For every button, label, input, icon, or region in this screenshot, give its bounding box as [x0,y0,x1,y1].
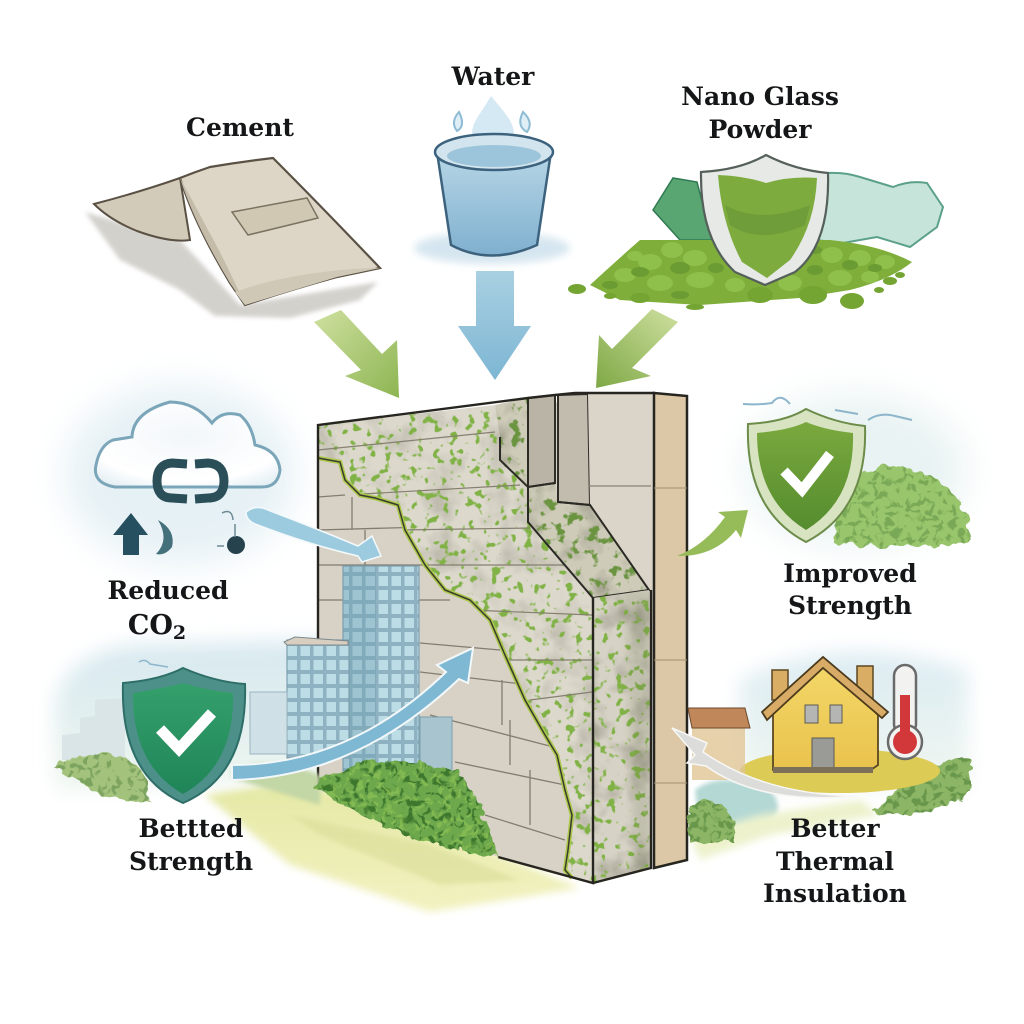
mossy inner strips [495,399,647,597]
wall outline [318,393,655,883]
green glass chunk [653,178,712,240]
icon: bird [139,660,168,667]
panel: ground [205,780,880,912]
illustration: bushes around the wall [50,740,975,865]
arrow: from water [458,271,531,380]
icon: house windows [805,705,842,723]
brick lines [318,495,590,840]
icon: yellow house body [773,665,878,772]
arrow: house to wall [672,728,857,798]
darker powder grains [602,246,882,299]
arrow: curved to wall from bettered strength [232,648,473,780]
title: Cement: Cement [186,113,294,142]
group: Improved Strength [677,398,975,620]
icon: house roof [762,657,888,720]
label: Improved Strength: Strength [788,591,912,620]
icon: small sprout [156,520,173,554]
title: Water: Water [451,62,535,91]
arrow: from nano glass [596,309,678,388]
icon: check [784,454,830,490]
loose powder grains [568,272,905,310]
arrow: wall to cloud [246,507,381,562]
label: Improved Strength: Improved [783,559,917,588]
panel: soft background halos [55,385,968,830]
side panel joints [654,488,687,783]
icon: small house [688,708,750,780]
label: Better Thermal Insulation: Better [790,814,880,843]
label: Reduced CO2: 2 [173,622,186,644]
group: Bettered Strength [123,660,253,876]
arrow: to shield [677,510,748,556]
building: second tower [287,640,349,758]
glass shield [701,155,828,285]
group: Better Thermal Insulation [672,657,940,908]
label: Reduced CO2: Reduced [108,576,228,605]
bush: main [313,759,499,858]
bush: near wall [686,798,736,844]
building: third block [250,692,287,754]
icon: house lawn [740,749,940,793]
bush: left [54,752,152,802]
wall front brick face [318,393,655,883]
building: roof cap [284,637,348,645]
concrete large panel [588,393,652,590]
icon: birds [743,398,912,420]
concrete block one [528,395,555,487]
icon: cement bags [85,158,380,318]
icon: green shield [748,409,865,542]
glass bottle [815,173,943,247]
panel: concrete wall [318,393,687,890]
inner strip outline [500,398,649,598]
icon: teal shield inner [133,683,233,794]
label: Bettted Strength: Bettted [138,814,244,843]
crack line [318,458,572,878]
building: dark tower side [343,566,376,771]
icon: check [160,713,212,749]
icon: thermometer [888,665,922,759]
icon: nano glass powder pile with shield and bottle [568,155,943,310]
icon: cloud [95,402,280,487]
icon: carbon cycle [157,463,224,499]
powder pile [590,240,912,305]
illustration: city buildings [62,566,452,772]
exposed aggregate region [318,395,598,890]
title: Nano Glass Powder: Nano Glass [681,82,839,111]
crack edge with moss [318,458,572,878]
label: Better Thermal Insulation: Thermal [776,847,894,876]
concrete block two [558,394,590,505]
arrow: from cement [314,310,399,398]
icon: house door [812,738,834,768]
icon: teal shield [123,668,245,803]
icon: bucket of water [414,96,570,264]
building: main tower [343,566,419,771]
wooden side panel [654,393,687,868]
icon: green bush [833,464,971,549]
icon: up arrow [113,513,148,555]
bush: lower right [872,757,973,816]
icon: house chimneys [772,666,873,700]
icon: green shield inner [757,422,853,530]
label: Reduced CO2: CO [128,610,173,641]
powder grains [614,242,895,292]
bush: pale middle [232,764,320,805]
icon: house base [773,767,873,773]
infographic canvas [50,66,974,916]
group: Reduced CO2 [95,402,381,644]
label: Bettted Strength: Strength [129,847,253,876]
building: faded distant skyline [62,698,125,760]
panel joint [588,485,651,487]
building: lower right block [420,717,452,772]
right face with moss [593,590,650,882]
title: Nano Glass Powder: Powder [709,115,812,144]
label: Better Thermal Insulation: Insulation [763,879,907,908]
green shield inner [718,175,817,278]
icon: small bomb [217,512,245,554]
